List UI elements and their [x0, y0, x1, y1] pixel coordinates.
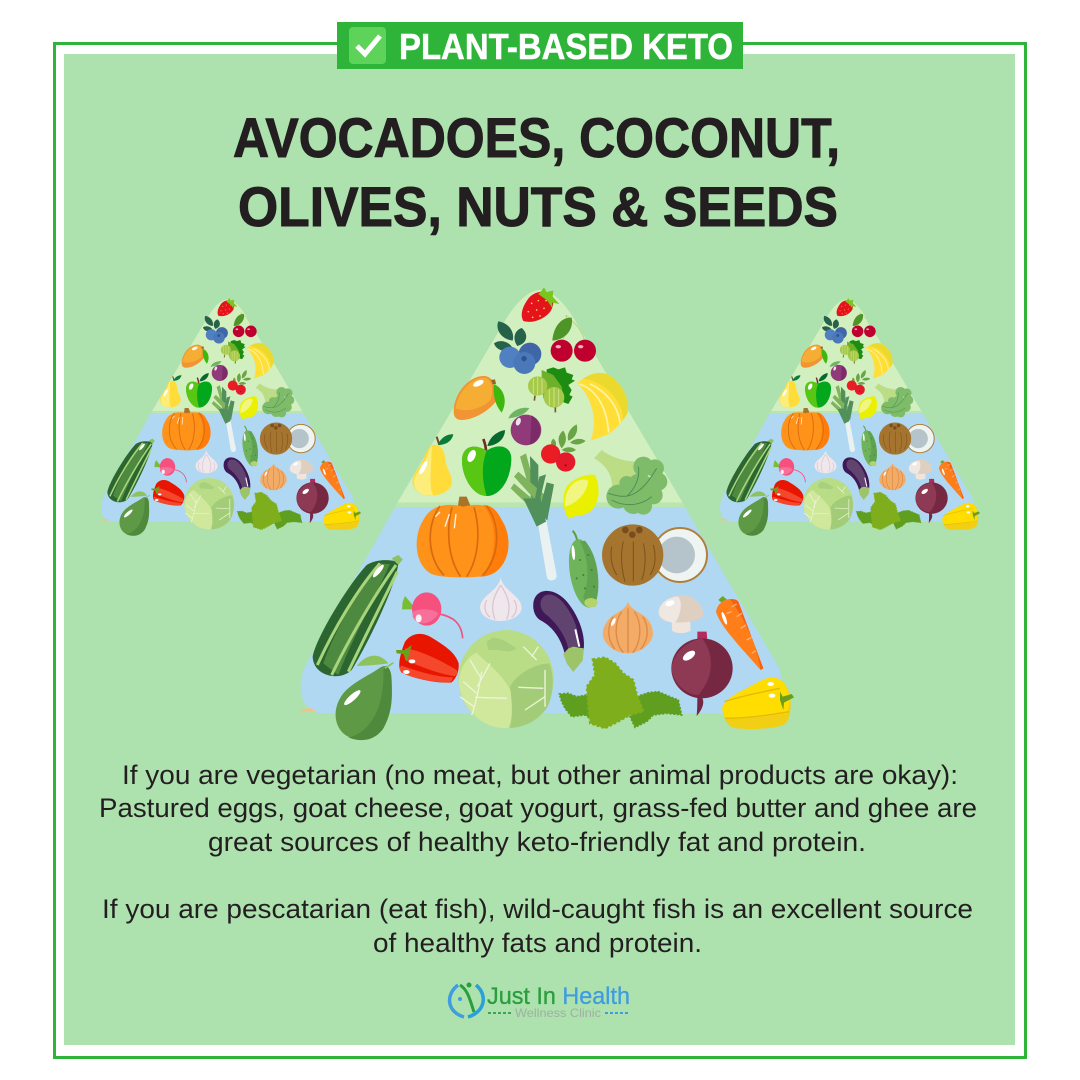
- body text: great sources of healthy keto-friendly fat and protein.: [208, 827, 866, 857]
- logo: Just In Health Wellness Clinic: [450, 982, 630, 1020]
- right food pyramid: [719, 298, 980, 536]
- icon: green apple: [462, 430, 511, 496]
- icon: eggplant: [533, 591, 584, 672]
- body text: of healthy fats and protein.: [373, 928, 702, 958]
- icon: yellow bell pepper: [722, 677, 794, 729]
- body text: [99, 760, 977, 958]
- icon: pumpkin: [417, 497, 508, 577]
- icon: mushroom: [659, 595, 703, 633]
- icon: cranberries: [541, 424, 586, 472]
- logo name: Just In Health: [487, 983, 630, 1010]
- title: [233, 106, 840, 238]
- icon: coconut: [602, 524, 707, 586]
- icon: lettuce: [559, 657, 682, 728]
- icon: logo mark: [450, 982, 483, 1017]
- icon: cabbage: [458, 630, 554, 728]
- badge label: PLANT-BASED KETO: [399, 26, 733, 67]
- icon: leek: [511, 453, 554, 520]
- icon: strawberry: [522, 287, 559, 322]
- icon: avocado: [299, 656, 393, 740]
- vegetables group: [299, 497, 794, 740]
- icon: garlic: [480, 577, 522, 621]
- body text: Pastured eggs, goat cheese, goat yogurt, grass-fed butter and ghee are: [99, 793, 977, 823]
- icon: red bell pepper: [396, 634, 459, 683]
- body text: If you are pescatarian (eat fish), wild-caught fish is an excellent source: [102, 894, 973, 924]
- icon: plum: [508, 408, 541, 445]
- icon: cherries: [551, 315, 596, 362]
- badge: plant-based keto: [337, 22, 743, 69]
- icon: pear: [413, 434, 453, 496]
- logo tagline: Wellness Clinic: [515, 1006, 601, 1020]
- title: AVOCADOES, COCONUT,: [233, 106, 840, 169]
- left food pyramid: [100, 298, 361, 536]
- icon: zucchini: [313, 555, 403, 676]
- body text: If you are vegetarian (no meat, but other animal products are okay):: [122, 760, 958, 790]
- icon: banana: [577, 373, 628, 441]
- title: OLIVES, NUTS & SEEDS: [238, 175, 838, 238]
- pyramid tier: fruits: [395, 290, 685, 507]
- icon: blueberries: [494, 321, 541, 374]
- icon: check mark: [349, 27, 386, 64]
- central food pyramid: [299, 287, 794, 740]
- icon: beet: [671, 632, 733, 716]
- icon: mango: [454, 376, 505, 420]
- icon: carrot: [716, 596, 763, 670]
- icon: radish: [402, 592, 463, 638]
- icon: cucumber: [564, 531, 603, 610]
- icon: broccoli: [594, 450, 667, 515]
- pyramid tier: vegetables: [301, 507, 782, 713]
- icon: leek stem: [523, 498, 557, 581]
- icon: lemon: [563, 475, 599, 519]
- icon: onion: [603, 602, 653, 653]
- icon: gooseberries: [528, 367, 575, 412]
- fruits group: [413, 287, 667, 520]
